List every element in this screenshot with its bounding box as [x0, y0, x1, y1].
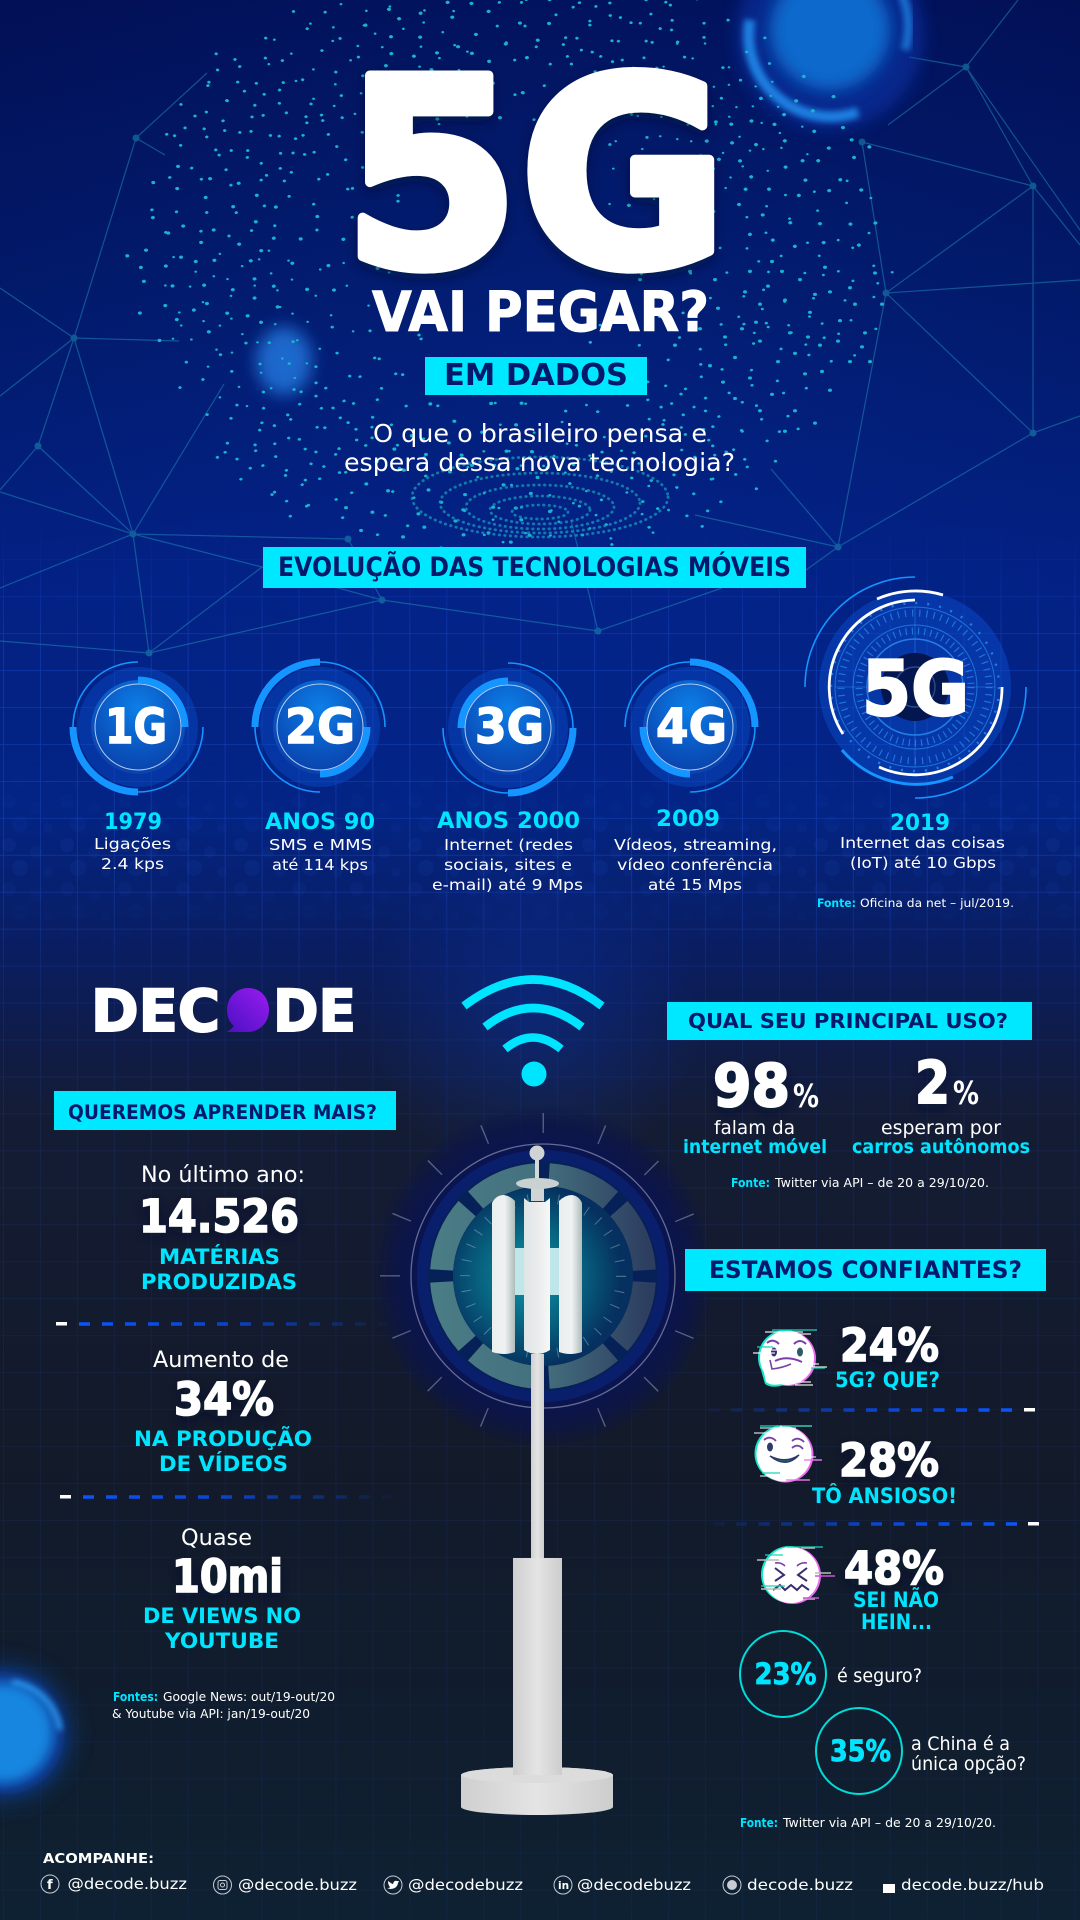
footer: social links: @decodebuzz	[577, 1876, 691, 1894]
divider left 1	[56, 1322, 392, 1326]
anos 2000 text: Internet (redes	[444, 836, 573, 854]
source confiantes: Twitter via API – de 20 a 29/10/20.	[782, 1815, 996, 1830]
stat: 24%	[835, 1319, 940, 1393]
intro text: espera dessa nova tecnologia?	[344, 448, 735, 477]
stat: 98%	[683, 1051, 827, 1158]
heading: qual seu principal uso: QUAL SEU PRINCIPAL USO?	[688, 1009, 1008, 1033]
stat: 28%: TÔ ANSIOSO!	[812, 1483, 957, 1509]
stat: 24%: 24%	[840, 1319, 939, 1372]
callout: 35%	[816, 1708, 1026, 1794]
stat: youtube	[143, 1526, 301, 1653]
stat: 28%	[812, 1434, 957, 1509]
2009 text: Vídeos, streaming,	[614, 836, 777, 854]
stat: 2%: carros autônomos	[852, 1136, 1030, 1158]
1979 text: 1979	[104, 810, 162, 835]
badge 4G	[625, 662, 755, 792]
stat: 24%: 5G? QUE?	[835, 1368, 940, 1393]
stat: youtube: Quase	[181, 1526, 252, 1551]
footer: acompanhe: ACOMPANHE:	[43, 1851, 154, 1867]
heading: evolução	[263, 547, 806, 588]
anos 90 text: até 114 kps	[272, 856, 368, 874]
anos 2000 text: sociais, sites e	[444, 856, 572, 874]
source uso: Fonte:	[731, 1175, 770, 1190]
footer: social links	[41, 1875, 1044, 1894]
source left	[112, 1689, 335, 1721]
antenna tower	[371, 1104, 715, 1815]
stat: 98%: 98	[713, 1051, 790, 1120]
stat: 48%: 48%	[844, 1542, 944, 1595]
icon: thinking emoji	[753, 1330, 827, 1387]
stat: youtube: DE VIEWS NO	[143, 1604, 301, 1628]
callout: 23%	[740, 1631, 922, 1717]
badge 3G	[443, 663, 573, 793]
intro text: O que o brasileiro pensa e	[373, 419, 707, 448]
source left: & Youtube via API: jan/19-out/20	[112, 1706, 310, 1721]
badge 2G	[255, 662, 385, 792]
source left: Google News: out/19-out/20	[163, 1689, 335, 1704]
badge 4G: 4G	[656, 699, 727, 755]
divider left 2	[60, 1495, 396, 1498]
stat: vídeos: NA PRODUÇÃO	[134, 1426, 312, 1451]
badge 5G	[805, 577, 1026, 798]
anos 2000 text: e-mail) até 9 Mps	[432, 876, 583, 894]
2009 text	[614, 807, 777, 894]
decode logo: DEC	[91, 977, 220, 1045]
heading: evolução: EVOLUÇÃO DAS TECNOLOGIAS MÓVEIS	[278, 551, 791, 583]
subtitle vai pegar: VAI PEGAR?	[372, 280, 709, 344]
title 5G: 5G	[343, 25, 728, 327]
source evolução: Oficina da net – jul/2019.	[860, 896, 1014, 910]
2009 text: até 15 Mps	[648, 876, 742, 894]
1979 text	[94, 810, 171, 873]
anos 2000 text	[432, 809, 583, 894]
em dados tag: EM DADOS	[444, 358, 628, 393]
heading: queremos aprender mais	[54, 1091, 396, 1130]
2019 text: 2019	[890, 811, 950, 836]
stat: 98%: falam da	[714, 1117, 795, 1139]
glow orb bottom left	[0, 1657, 79, 1809]
source confiantes: Fonte:	[740, 1815, 778, 1830]
badge 3G: 3G	[475, 699, 544, 755]
stat: matérias: No último ano:	[141, 1163, 305, 1188]
anos 90 text: SMS e MMS	[269, 836, 372, 854]
icon: instagram	[214, 1876, 232, 1894]
2009 text: 2009	[656, 807, 720, 832]
network lines	[0, 0, 1080, 656]
2019 text: Internet das coisas	[840, 834, 1005, 852]
glow orb top right	[736, 0, 924, 129]
footer: social links: @decode.buzz	[68, 1875, 187, 1893]
stat: 2%: 2	[915, 1048, 950, 1117]
stat: vídeos: 34%	[174, 1373, 274, 1426]
stat: 2%: esperam por	[881, 1117, 1001, 1139]
callout: 35%: a China é a	[911, 1733, 1010, 1755]
glow orb middle left	[256, 327, 312, 395]
2019 text: (IoT) até 10 Gbps	[850, 854, 996, 872]
stat: 2%	[852, 1048, 1030, 1158]
heading: queremos aprender mais: QUEREMOS APRENDER MAIS?	[68, 1101, 377, 1124]
footer: social links: decode.buzz	[747, 1876, 853, 1894]
icon: linkedin	[554, 1876, 572, 1894]
source evolução: Fonte:	[817, 896, 856, 910]
icon: linkedin: in	[558, 1880, 569, 1892]
source left: Fontes:	[113, 1689, 158, 1704]
icon: twitter	[384, 1876, 402, 1894]
footer: social links: decode.buzz/hub	[901, 1876, 1044, 1894]
badge 2G: 2G	[285, 699, 355, 755]
heading: estamos confiantes: ESTAMOS CONFIANTES?	[709, 1256, 1022, 1284]
icon: facebook	[41, 1875, 59, 1893]
1979 text: 2.4 kps	[101, 855, 164, 873]
stat: 28%: 28%	[839, 1434, 939, 1487]
stat: matérias	[139, 1163, 305, 1294]
divider right 1	[705, 1408, 1035, 1412]
stat: 98%: %	[793, 1077, 819, 1115]
stat: vídeos: Aumento de	[153, 1348, 289, 1373]
badge 1G: 1G	[105, 699, 167, 755]
stat: 98%: internet móvel	[683, 1136, 827, 1158]
callout: 23%: é seguro?	[837, 1665, 922, 1687]
icon: facebook: f	[47, 1878, 53, 1893]
1979 text: Ligações	[94, 835, 171, 853]
decode logo	[91, 977, 356, 1045]
divider right 2	[709, 1522, 1039, 1526]
intro text	[344, 419, 735, 477]
anos 90 text	[265, 810, 375, 874]
heading: estamos confiantes	[685, 1249, 1046, 1291]
callout: 35%: única opção?	[911, 1753, 1026, 1775]
decode logo: DE	[273, 977, 356, 1045]
stat: 48%	[844, 1542, 944, 1635]
icon: worried emoji	[757, 1546, 835, 1604]
footer: social links: @decodebuzz	[408, 1876, 523, 1894]
stat: 48%: HEIN...	[861, 1610, 932, 1635]
badge 5G: 5G	[862, 644, 969, 733]
stat: 2%: %	[953, 1074, 979, 1112]
callout: 35%: 35%	[830, 1734, 891, 1768]
stat: vídeos	[134, 1348, 312, 1476]
badge 1G	[73, 662, 203, 792]
icon: wifi	[464, 980, 602, 1086]
heading: qual seu principal uso	[667, 1002, 1032, 1040]
icon: website	[723, 1876, 741, 1894]
2009 text: vídeo conferência	[617, 856, 773, 874]
stat: youtube: 10mi	[172, 1550, 283, 1603]
anos 2000 text: ANOS 2000	[437, 809, 580, 834]
stat: matérias: MATÉRIAS	[159, 1244, 280, 1269]
2019 text	[840, 811, 1005, 872]
stat: matérias: 14.526	[139, 1190, 299, 1243]
callout: 23%: 23%	[754, 1657, 816, 1691]
stat: vídeos: DE VÍDEOS	[159, 1451, 288, 1476]
stat: youtube: YOUTUBE	[164, 1629, 279, 1653]
anos 90 text: ANOS 90	[265, 810, 375, 835]
footer: social links: @decode.buzz	[238, 1876, 357, 1894]
icon: hub square	[883, 1884, 895, 1893]
stat: matérias: PRODUZIDAS	[141, 1270, 297, 1294]
icon: smiling emoji	[754, 1426, 822, 1482]
source uso: Twitter via API – de 20 a 29/10/20.	[774, 1175, 989, 1190]
particle sphere	[87, 0, 936, 588]
stat: 48%: SEI NÃO	[853, 1587, 939, 1613]
